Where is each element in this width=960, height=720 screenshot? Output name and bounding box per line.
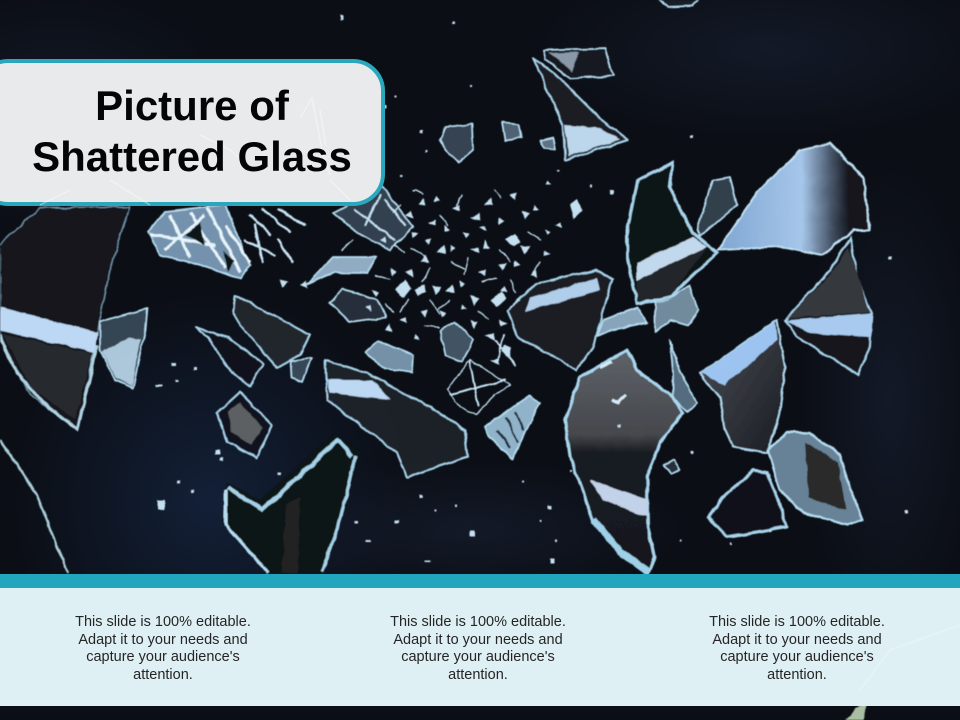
glass sliver at bottom edge	[842, 704, 868, 720]
faint glass reflection inside caption panel	[0, 588, 960, 706]
text block: centre: attention.	[448, 667, 508, 683]
shard: small cone beside left piece	[100, 308, 147, 388]
text block: right: Adapt it to your needs and	[712, 632, 882, 648]
shard: ribbed lower-centre piece	[485, 395, 540, 460]
text block: right: This slide is 100% editable.	[709, 614, 885, 630]
shard: large central bowl	[565, 350, 683, 573]
text block: left: capture your audience's	[86, 649, 240, 665]
faint glass reflection inside title panel	[40, 96, 350, 206]
shard: rubble under tall piece	[655, 285, 698, 332]
shard: thick lower right piece	[768, 432, 863, 525]
text block: right	[709, 614, 885, 683]
shard: long curved piece	[325, 360, 468, 477]
text block: centre: Adapt it to your needs and	[393, 632, 563, 648]
text block: left: This slide is 100% editable.	[75, 614, 251, 630]
shard: big bright right piece	[718, 143, 870, 255]
shard: top wedge	[533, 58, 628, 160]
title panel	[0, 59, 385, 206]
text block: left: Adapt it to your needs and	[78, 632, 248, 648]
shard: top pane	[545, 48, 613, 78]
shard: small leaf	[697, 177, 737, 237]
shard: tiny crumb	[663, 459, 680, 474]
text block: centre	[390, 614, 566, 683]
shard: small rectangular piece	[330, 288, 387, 322]
shard: lower right piece	[785, 237, 872, 375]
text block: left: attention.	[133, 667, 193, 683]
shard: thin far-left curved edge	[0, 440, 68, 573]
shard: small diamond with grey centre	[217, 392, 272, 458]
shard: small cluster centre	[440, 322, 515, 415]
shard: arc beside bowl	[670, 340, 697, 412]
shard: mid right piece	[700, 320, 785, 453]
shard: small top fragments	[440, 122, 555, 163]
title: Picture of	[95, 82, 289, 129]
caption panel	[0, 588, 960, 706]
shard: far left large piece	[0, 207, 130, 430]
shard: dense cluster under title	[148, 205, 305, 278]
glass specks	[155, 15, 908, 564]
text block: centre: capture your audience's	[401, 649, 555, 665]
text block: right: attention.	[767, 667, 827, 683]
glass scraps	[342, 190, 540, 327]
shard: centre diamond	[507, 270, 612, 370]
text block: centre: This slide is 100% editable.	[390, 614, 566, 630]
shard: open triangle	[708, 470, 787, 537]
shard: connector sliver	[597, 307, 647, 337]
shard: bottom open frame	[223, 433, 360, 573]
teal divider bar	[0, 574, 960, 588]
shard: pair at upper left of field	[195, 295, 312, 387]
shard: small sliver centre	[365, 341, 413, 372]
shard: top edge fragment	[655, 0, 702, 7]
glass debris	[280, 180, 582, 365]
shard: cluster piece right of title	[333, 187, 413, 250]
shard: flat sliver	[307, 257, 377, 284]
title	[32, 82, 352, 180]
shard: tall curved piece	[627, 163, 717, 303]
text block: left	[75, 614, 251, 683]
title: Shattered Glass	[32, 133, 352, 180]
text block: right: capture your audience's	[720, 649, 874, 665]
